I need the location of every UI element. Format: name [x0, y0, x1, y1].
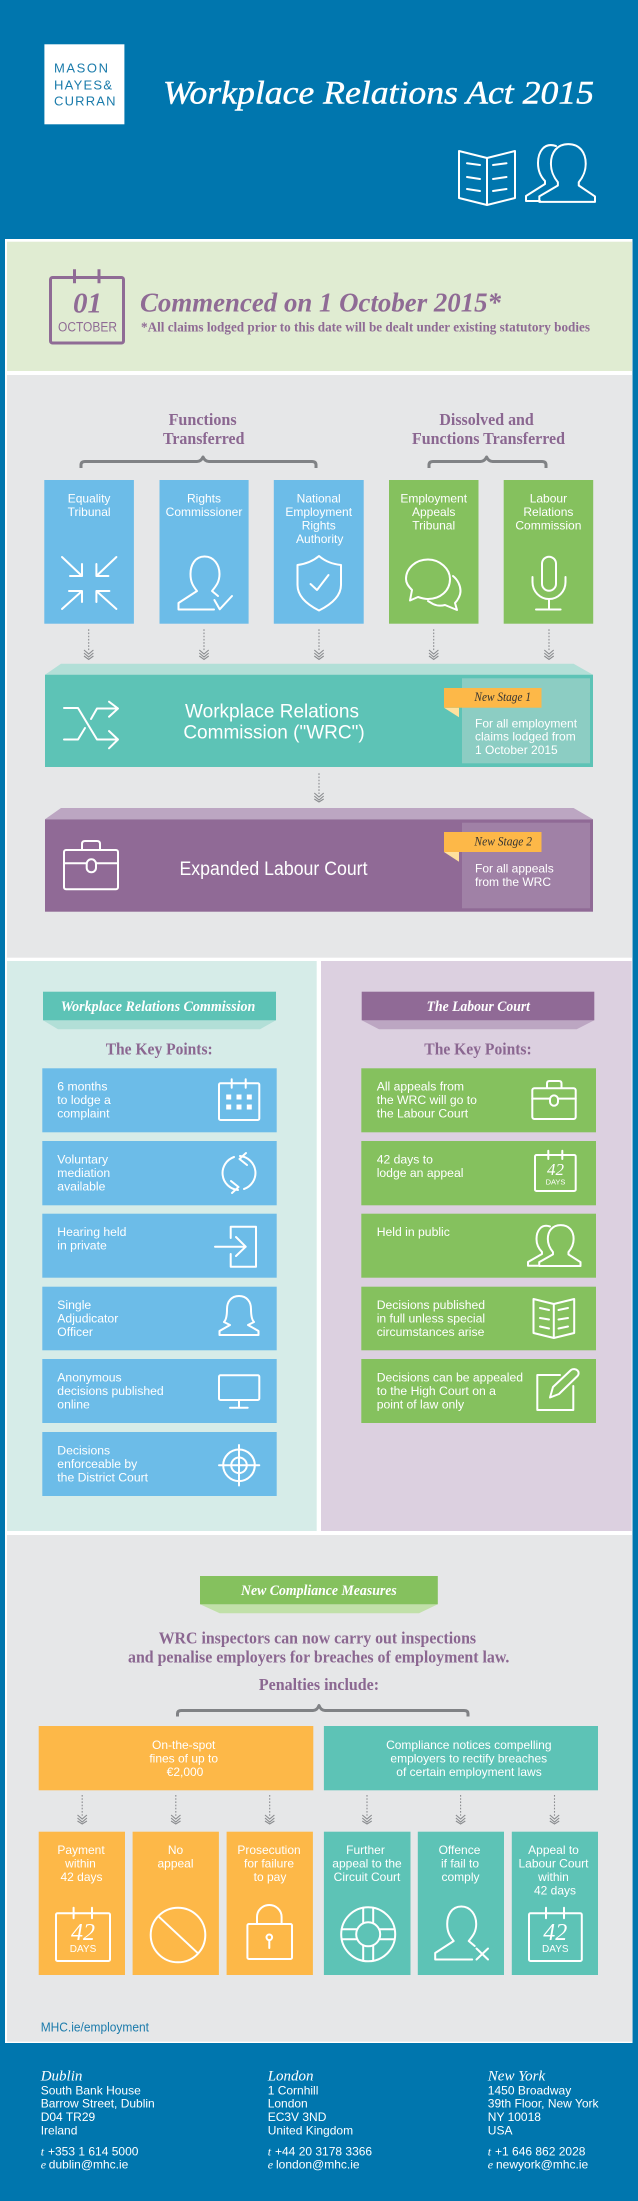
box: on-the-spot fines	[39, 1726, 313, 1790]
key point: enforceable decisions: the District Court	[57, 1470, 149, 1484]
icon: woman	[220, 1296, 258, 1335]
icon: monitor	[219, 1375, 259, 1408]
box: compliance notices: of certain employment laws	[396, 1765, 542, 1779]
office: Dublin: dublin@mhc.ie	[49, 2158, 129, 2172]
logo	[44, 44, 124, 124]
icon: refresh	[223, 1153, 255, 1193]
office: Dublin: Barrow Street, Dublin	[41, 2097, 155, 2111]
ribbon: new stage 2: New Stage 2	[473, 835, 532, 849]
ribbon heading: Workplace Relations Commission	[61, 999, 255, 1015]
box: offence: if fail to	[441, 1856, 479, 1870]
box: no appeal	[133, 1832, 219, 1975]
heading: functions transferred	[163, 410, 245, 448]
box: National Employment Rights Authority: National	[297, 492, 341, 506]
ribbon heading	[362, 992, 594, 1029]
icon: speech bubbles	[406, 560, 460, 610]
key point: all appeals: the WRC will go to	[377, 1093, 477, 1107]
office: London	[267, 2069, 372, 2172]
note: stage 2: from the WRC	[475, 875, 551, 889]
icon: prohibited	[151, 1908, 205, 1962]
icon: padlock	[247, 1905, 292, 1959]
office: New York	[487, 2069, 600, 2172]
icon: calendar 42 days: DAYS	[70, 1944, 97, 1955]
office: London: 1 Cornhill	[268, 2083, 318, 2097]
box: no appeal: No	[168, 1843, 183, 1857]
office: Dublin: D04 TR29	[41, 2110, 96, 2124]
box: prosecution: Prosecution	[237, 1843, 301, 1857]
arrow: WRC to Labour Court	[314, 773, 324, 802]
office: New York: NY 10018	[488, 2110, 541, 2124]
icon: door arrow	[215, 1227, 256, 1267]
key point: held in public: Held in public	[377, 1225, 450, 1239]
link: MHC.ie/employment	[41, 2020, 149, 2035]
office: Dublin: e	[41, 2158, 47, 2172]
heading: Commenced on 1 October 2015*	[140, 288, 501, 318]
key point: 6 months: 6 months	[57, 1080, 107, 1094]
box: compliance notices: Compliance notices compelling	[386, 1738, 552, 1752]
logo: CURRAN	[54, 93, 116, 108]
box: further appeal	[324, 1832, 410, 1975]
key point: decisions published: Decisions published	[377, 1298, 485, 1312]
box: Labour Relations Commission: Commission	[515, 518, 581, 532]
footer	[40, 2069, 600, 2172]
key point: single adjudicator: Adjudicator	[57, 1312, 118, 1326]
icon: calendar 01 October: 01	[73, 288, 102, 320]
office: London: e	[268, 2158, 274, 2172]
key point: 6 months: complaint	[57, 1107, 110, 1121]
icon: calendar 42 days	[56, 1908, 110, 1961]
key point: 42 days: lodge an appeal	[377, 1166, 463, 1180]
box: National Employment Rights Authority: Employment	[285, 505, 353, 519]
icon: calendar 42 days: DAYS	[546, 1178, 565, 1186]
office: London: EC3V 3ND	[268, 2110, 327, 2124]
icon: calendar 42 days	[529, 1908, 582, 1961]
key point: high court appeal: Decisions can be appealed	[377, 1371, 523, 1385]
office: Dublin: t	[41, 2144, 45, 2158]
key point: voluntary mediation: Voluntary	[57, 1152, 109, 1166]
box: Rights Commissioner: Commissioner	[166, 505, 242, 519]
key point: anonymous decisions	[42, 1359, 277, 1423]
office: New York: USA	[488, 2124, 512, 2138]
office: London: London	[267, 2069, 314, 2085]
key point: decisions published: circumstances arise	[377, 1325, 485, 1339]
key point: anonymous decisions: online	[57, 1398, 90, 1412]
text: WRC inspectors	[128, 1628, 509, 1666]
office: New York: +1 646 862 2028	[495, 2144, 586, 2158]
icon: calendar 42 days: 42	[547, 1160, 564, 1179]
bracket: dissolved	[429, 457, 546, 468]
ribbon heading	[43, 992, 276, 1029]
icon: lifebuoy	[341, 1907, 395, 1961]
ribbon heading: The Labour Court	[427, 999, 531, 1015]
icon: target	[219, 1445, 259, 1486]
heading: The Key Points:	[424, 1039, 532, 1058]
box: Labour Relations Commission: Labour	[530, 492, 567, 506]
block: Workplace Relations Commission	[45, 664, 593, 767]
heading: dissolved and functions transferred: Dissolved and	[439, 410, 534, 429]
box: appeal to labour court: Labour Court	[518, 1856, 589, 1870]
key point: 42 days	[361, 1141, 596, 1205]
box: Employment Appeals Tribunal: Employment	[400, 492, 468, 506]
box: prosecution	[227, 1832, 313, 1975]
box: compliance notices: employers to rectify breaches	[390, 1752, 547, 1766]
office: New York: newyork@mhc.ie	[496, 2158, 589, 2172]
key point: hearing in private: Hearing held	[57, 1225, 126, 1239]
key point: single adjudicator: Single	[57, 1298, 91, 1312]
ribbon: new stage 1: New Stage 1	[473, 690, 531, 704]
office: New York: 1450 Broadway	[488, 2083, 571, 2097]
icon: two people	[528, 1225, 580, 1266]
box: National Employment Rights Authority: Authority	[296, 532, 343, 546]
box: on-the-spot fines: On-the-spot	[152, 1738, 216, 1752]
panel: Labour Court key points	[321, 961, 632, 1531]
icon: calendar 42 days	[535, 1151, 576, 1191]
office: Dublin: Dublin	[40, 2069, 82, 2085]
icon: open book	[534, 1299, 574, 1338]
box: payment within 42 days	[39, 1832, 125, 1975]
key point: anonymous decisions: Anonymous	[57, 1371, 122, 1385]
key point: high court appeal: point of law only	[377, 1398, 465, 1412]
key point: high court appeal: to the High Court on a	[377, 1384, 496, 1398]
key point: decisions published	[361, 1287, 596, 1350]
icon: microphone	[532, 557, 566, 610]
office: Dublin: +353 1 614 5000	[48, 2144, 139, 2158]
box: Employment Appeals Tribunal: Appeals	[412, 505, 455, 519]
box: payment within 42 days: Payment	[57, 1843, 105, 1857]
key point: hearing in private: in private	[57, 1238, 107, 1252]
box: Rights Commissioner: Rights	[187, 492, 221, 506]
heading: penalties: Penalties include:	[259, 1675, 379, 1694]
box: Employment Appeals Tribunal: Tribunal	[412, 518, 455, 532]
box: compliance notices	[324, 1726, 598, 1790]
box: Labour Relations Commission: Relations	[523, 505, 573, 519]
box: appeal to labour court	[512, 1832, 598, 1975]
box: on-the-spot fines: fines of up to	[149, 1752, 218, 1766]
logo: HAYES&	[54, 77, 112, 92]
icon: calendar 01 October: OCTOBER	[58, 320, 117, 335]
heading: functions transferred: Functions	[169, 410, 237, 429]
logo: MASON	[54, 61, 108, 76]
key point: single adjudicator	[42, 1287, 277, 1350]
box: National Employment Rights Authority	[274, 480, 364, 624]
key point: anonymous decisions: decisions published	[57, 1384, 164, 1398]
ribbon: new stage 2	[444, 832, 542, 862]
key point: voluntary mediation	[42, 1141, 277, 1205]
icon: person with cross	[435, 1906, 488, 1960]
box: appeal to labour court: within	[537, 1870, 569, 1884]
arrows: to outcomes	[78, 1795, 559, 1824]
box: Rights Commissioner	[160, 480, 249, 624]
office: New York: e	[488, 2158, 494, 2172]
box: payment within 42 days: 42 days	[60, 1870, 103, 1884]
footnote: *All claims lodged prior to this date will be dealt under existing statutory bodies	[141, 320, 590, 335]
header	[44, 44, 595, 205]
key point: all appeals	[361, 1068, 596, 1132]
icon: calendar 42 days: DAYS	[542, 1944, 569, 1955]
box: on-the-spot fines: €2,000	[167, 1765, 204, 1779]
ribbon heading: New Compliance Measures	[240, 1583, 397, 1599]
box: further appeal: Further	[346, 1843, 385, 1857]
key point: all appeals: All appeals from	[377, 1080, 464, 1094]
key point: high court appeal	[361, 1359, 596, 1423]
box: appeal to labour court: 42 days	[534, 1884, 576, 1898]
office: New York: 39th Floor, New York	[488, 2097, 600, 2111]
office: London: london@mhc.ie	[276, 2158, 360, 2172]
icon: shuffle arrows	[64, 702, 118, 748]
block: Expanded Labour Court	[45, 808, 593, 912]
icon: shield	[298, 556, 341, 610]
panel: compliance measures	[7, 1535, 632, 2042]
key point: held in public	[361, 1214, 596, 1278]
key point: single adjudicator: Officer	[57, 1325, 93, 1339]
key point: decisions published: in full unless special	[377, 1312, 485, 1326]
box: further appeal: Circuit Court	[334, 1870, 401, 1884]
bracket: functions transferred	[81, 457, 316, 468]
icon: calendar 42 days: 42	[71, 1920, 95, 1946]
panel: structure flow	[7, 375, 632, 958]
panel: WRC key points	[7, 961, 317, 1531]
icon: calendar	[219, 1079, 259, 1120]
icon: calendar 42 days: 42	[543, 1920, 567, 1946]
key point: 6 months: to lodge a	[57, 1093, 111, 1107]
box: offence	[418, 1832, 504, 1975]
label: labour court: Expanded Labour Court	[180, 859, 368, 880]
title: Workplace Relations Act 2015	[163, 75, 594, 111]
key point: enforceable decisions: enforceable by	[57, 1457, 138, 1471]
key point: 42 days: 42 days to	[377, 1152, 433, 1166]
text: WRC inspectors: and penalise employers for breaches of employment law.	[128, 1647, 509, 1666]
office: London: +44 20 3178 3366	[275, 2144, 372, 2158]
icon: briefcase	[64, 841, 118, 889]
label: WRC: Commission ("WRC")	[183, 723, 365, 744]
label: WRC: Workplace Relations	[185, 701, 359, 722]
box: prosecution: for failure	[244, 1856, 294, 1870]
icon: calendar 01 October	[50, 269, 124, 343]
box: Employment Appeals Tribunal	[389, 480, 478, 624]
icon: open book	[459, 151, 515, 205]
office: London: t	[268, 2144, 272, 2158]
icon: edit pen	[537, 1369, 579, 1410]
office: Dublin: Ireland	[41, 2124, 77, 2138]
box: further appeal: appeal to the	[332, 1856, 402, 1870]
bracket	[178, 1706, 468, 1716]
office: New York: t	[488, 2144, 492, 2158]
icon: person with check	[178, 556, 232, 610]
ribbon: new stage 1	[444, 688, 542, 717]
icon: compress arrows	[62, 557, 116, 609]
box: offence: Offence	[439, 1843, 481, 1857]
box: no appeal: appeal	[157, 1856, 194, 1870]
box: payment within 42 days: within	[64, 1856, 96, 1870]
key point: enforceable decisions	[42, 1432, 277, 1496]
note: stage 1: claims lodged from	[475, 730, 576, 744]
heading: dissolved and functions transferred	[412, 410, 566, 448]
box: Equality Tribunal	[44, 480, 134, 624]
icon: briefcase	[532, 1081, 576, 1119]
box: Labour Relations Commission	[504, 480, 593, 624]
icon: two people	[526, 144, 595, 202]
box: National Employment Rights Authority: Rights	[302, 518, 336, 532]
heading: The Key Points:	[106, 1039, 213, 1058]
note: stage 2: For all appeals	[475, 862, 554, 876]
note: stage 1: 1 October 2015	[475, 743, 558, 757]
ribbon heading	[200, 1576, 438, 1613]
key point: voluntary mediation: available	[57, 1180, 106, 1194]
box: Equality Tribunal: Equality	[68, 492, 110, 506]
arrows: boxes to WRC	[84, 629, 554, 660]
office: New York: New York	[487, 2069, 546, 2085]
panel: commencement date	[7, 242, 632, 371]
box: prosecution: to pay	[254, 1870, 286, 1884]
heading: dissolved and functions transferred: Functions Transferred	[412, 429, 566, 448]
office: Dublin	[40, 2069, 155, 2172]
box: Equality Tribunal: Tribunal	[68, 505, 111, 519]
office: Dublin: South Bank House	[41, 2083, 141, 2097]
office: London: London	[268, 2097, 308, 2111]
box: appeal to labour court: Appeal to	[528, 1843, 579, 1857]
key point: hearing in private	[42, 1214, 277, 1278]
key point: voluntary mediation: mediation	[57, 1166, 110, 1180]
box: offence: comply	[441, 1870, 480, 1884]
key point: 6 months	[42, 1068, 277, 1132]
key point: enforceable decisions: Decisions	[57, 1443, 110, 1457]
text: WRC inspectors: WRC inspectors can now carry out inspections	[159, 1628, 476, 1647]
office: London: United Kingdom	[268, 2124, 353, 2138]
note: stage 1: For all employment	[475, 716, 578, 730]
key point: all appeals: the Labour Court	[377, 1107, 469, 1121]
heading: functions transferred: Transferred	[163, 429, 245, 448]
